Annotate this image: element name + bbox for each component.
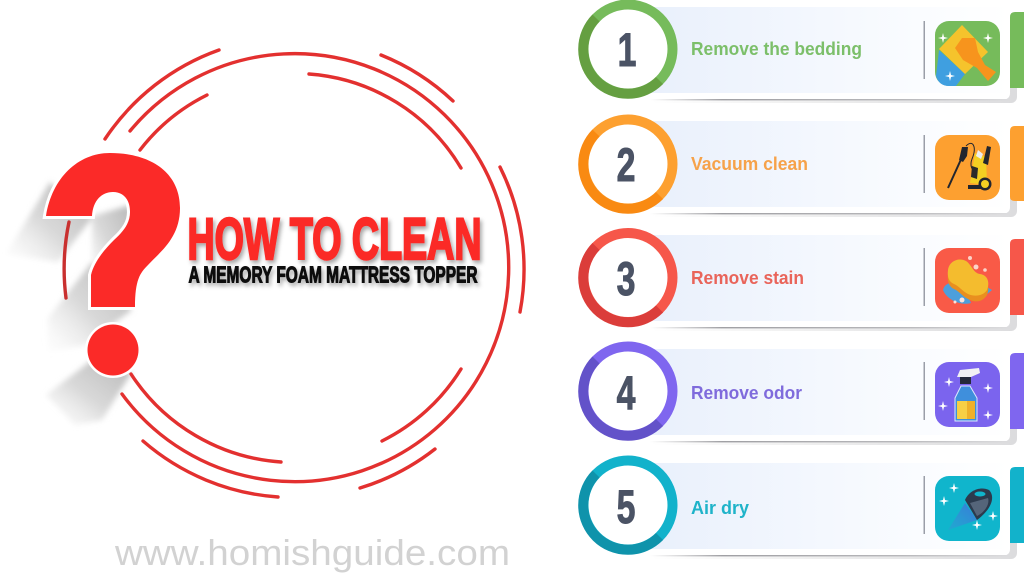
question mark long shadow (6, 182, 132, 425)
card shadow (650, 402, 1017, 445)
card gradient (650, 463, 1010, 549)
icon: cleaning glove (935, 21, 1000, 86)
card (640, 461, 1010, 556)
colour tab (1010, 467, 1024, 543)
colour tab (1010, 353, 1024, 429)
card bottom line (650, 441, 1010, 442)
main ring (122, 54, 509, 482)
number: 1 (618, 24, 636, 76)
card shadow (650, 60, 1017, 103)
number ring (583, 460, 672, 550)
icon: pressure washer vacuum (935, 135, 1000, 200)
card gradient (650, 349, 1010, 435)
step label: Remove odor (691, 383, 802, 403)
divider (924, 476, 925, 534)
title: HOW TO CLEAN (188, 207, 482, 272)
icon: handheld vacuum (935, 476, 1000, 541)
colour tab (1010, 126, 1024, 201)
step label: Vacuum clean (691, 154, 808, 174)
card gradient (650, 121, 1010, 207)
divider (924, 21, 925, 79)
divider (924, 248, 925, 306)
icon: question mark (46, 153, 180, 376)
question mark dot (88, 324, 138, 376)
number ring (583, 4, 672, 94)
card shadow (650, 288, 1017, 331)
card bottom line (650, 99, 1010, 100)
inner arc top right (309, 74, 461, 168)
number: 3 (617, 253, 635, 305)
card (640, 119, 1010, 214)
panel: step 4 (583, 346, 1024, 445)
number ring (583, 346, 672, 436)
step label: Air dry (691, 498, 749, 518)
card gradient (650, 7, 1010, 93)
panel: step 3 (583, 233, 1024, 331)
inner arc top left (140, 95, 207, 150)
divider (924, 362, 925, 420)
card shadow (650, 175, 1017, 217)
card (640, 233, 1010, 328)
card bottom line (650, 327, 1010, 328)
question mark hook and stem (46, 153, 180, 307)
outer arc bottom left (143, 441, 278, 497)
outer arc left (64, 222, 69, 298)
panel: step 5 (583, 460, 1024, 559)
colour tab (1010, 239, 1024, 315)
inner arc bottom left (131, 374, 281, 462)
number: 4 (617, 367, 636, 419)
card bottom line (650, 213, 1010, 214)
step label: Remove the bedding (691, 39, 862, 59)
card bottom line (650, 555, 1010, 556)
panel: step 2 (583, 119, 1024, 217)
icon: spray bottle (935, 362, 1000, 427)
colour tab (1010, 12, 1024, 88)
outer arc bottom right (360, 449, 435, 488)
icon: sponge (935, 248, 1000, 313)
red circular ring graphic (64, 50, 524, 497)
number ring (583, 233, 672, 322)
divider (924, 135, 925, 193)
outer arc right (500, 167, 524, 312)
card shadow (650, 516, 1017, 559)
outer arc top left (105, 50, 219, 139)
step label: Remove stain (691, 268, 804, 288)
outer arc top right (381, 55, 453, 101)
card (640, 5, 1010, 100)
website watermark: www.homishguide.com (114, 532, 510, 573)
inner arc bottom right (382, 369, 461, 441)
number: 2 (617, 139, 635, 191)
subtitle: A MEMORY FOAM MATTRESS TOPPER (188, 262, 478, 288)
card gradient (650, 235, 1010, 321)
number ring (583, 120, 672, 209)
card (640, 347, 1010, 442)
number: 5 (617, 481, 635, 533)
panel: step 1 (583, 4, 1024, 103)
